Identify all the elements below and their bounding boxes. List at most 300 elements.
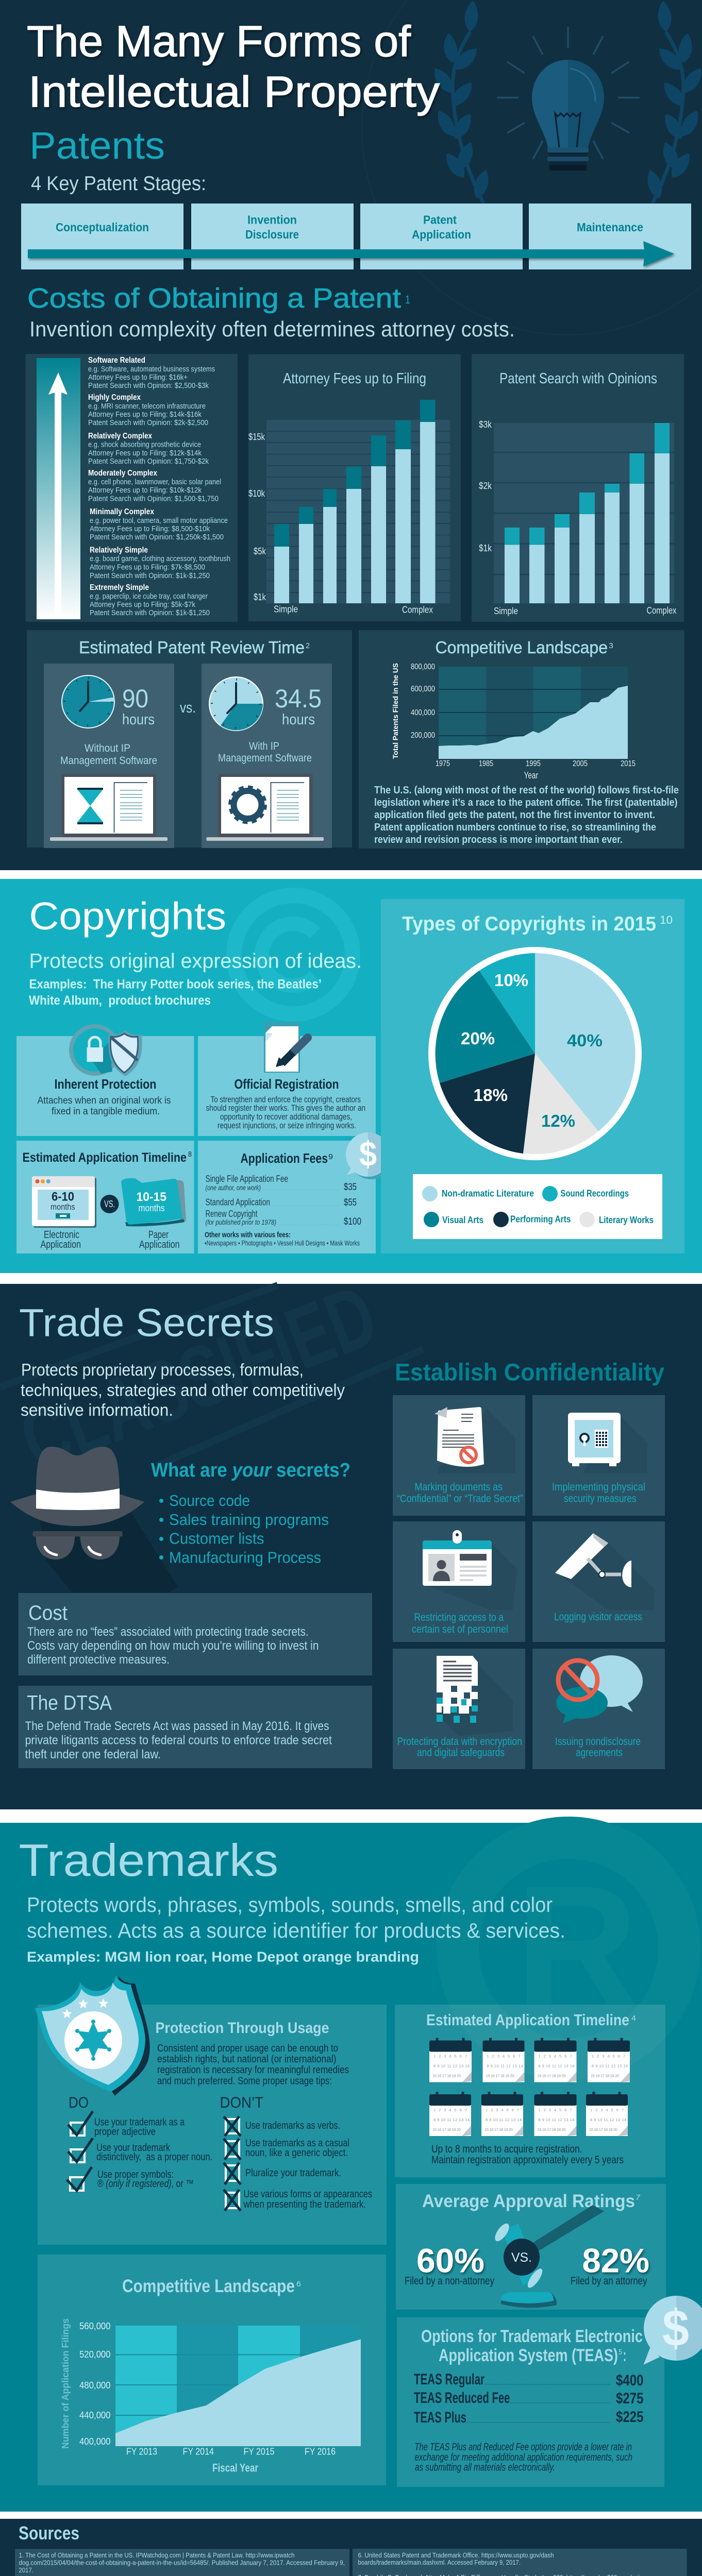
axis labels: $1k	[479, 543, 492, 553]
axis labels: FY 2014	[182, 2446, 214, 2456]
fee rows: $100	[344, 1216, 361, 1227]
panel: inherent protection: Inherent Protection	[55, 1076, 157, 1092]
panel: sources left: dog.com/2015/04/04/the-cost-of-obtaining-a-patent-in-the-us/id=56485/. Published January 7, 2017. Accessed February 9,	[19, 2558, 345, 2567]
text: usage description	[157, 2043, 349, 2087]
panel: patent search chart	[472, 354, 684, 622]
heading: patents: Patents	[29, 124, 165, 167]
icon: paper folder: months	[138, 1203, 165, 1213]
stat: 60 percent: 60%	[416, 2241, 484, 2279]
tier: software related	[88, 356, 215, 390]
text: usage description: and much preferred. Some proper usage tips:	[157, 2075, 332, 2087]
text: trade secrets definition: techniques, strategies and other competitively	[21, 1381, 345, 1399]
comparison: with software: 34.5	[275, 684, 322, 713]
axis labels: Complex	[646, 605, 676, 616]
card: restricting access	[393, 1521, 525, 1642]
axis labels: 800,000	[411, 663, 435, 671]
tier: moderately complex: Attorney Fees up to Filing: $10k-$12k	[88, 486, 202, 495]
arrow: timeline	[28, 241, 674, 266]
icon: encrypted document	[437, 1656, 478, 1723]
fee table: $275	[616, 2390, 643, 2407]
tier: highly complex: Patent Search with Opinion: $2k-$2,500	[88, 418, 208, 427]
icon: speech bubbles with prohibition sign	[556, 1655, 643, 1723]
icon: safe	[568, 1413, 621, 1466]
panel: average approval ratings: 7	[636, 2193, 641, 2202]
icon: calendar 1: 1 2 3 4 5 6 7	[433, 2054, 467, 2059]
text: trademarks definition: schemes. Acts as a source identifier for products & services.	[27, 1919, 565, 1942]
tier: relatively simple: e.g. board game, clothing accessory, toothbrush	[90, 554, 230, 563]
tier: extremely simple: e.g. paperclip, ice cube tray, coat hanger	[90, 592, 208, 601]
area chart: application filings: Number of Application Filings	[60, 2318, 71, 2449]
chart title: 10	[660, 913, 673, 926]
comparison: with software: With IP	[249, 740, 279, 752]
text: trademarks definition: Protects words, phrases, symbols, sounds, smells, and color	[27, 1893, 553, 1917]
card: protecting data	[393, 1649, 525, 1769]
panel: inherent protection	[16, 1026, 194, 1136]
stage: patent application: Application	[412, 228, 471, 241]
heading: establish confidentiality: Establish Confidentiality	[395, 1358, 664, 1386]
icon: browser window: months	[51, 1202, 75, 1212]
pie chart: 18%	[473, 1086, 508, 1105]
panel: TEAS options: Application System (TEAS)	[439, 2346, 618, 2365]
list: secrets: Source code	[169, 1492, 250, 1510]
legend: Performing Arts	[510, 1214, 571, 1224]
heading: 4 key patent stages: 4 Key Patent Stages:	[31, 173, 206, 195]
tier: highly complex: e.g. MRI scanner, telecom infrastructure	[88, 402, 206, 411]
watermark: registered symbol: R	[515, 1850, 638, 2040]
panel: cost: There are no “fees” associated with protecting trade secrets.	[27, 1625, 308, 1639]
panel: competitive landscape trademarks: Competitive Landscape	[122, 2276, 295, 2296]
card: marking documents: “Confidential” or “Trade Secret”	[397, 1493, 523, 1504]
comparison: without software: Without IP	[85, 742, 130, 754]
icon: clock 90 hours	[62, 675, 114, 728]
panel: competitive landscape trademarks	[38, 2255, 386, 2485]
tier: minimally complex: Patent Search with Opinion: $1,250k-$1,500	[90, 533, 224, 541]
axis labels	[79, 2321, 336, 2456]
pie chart: 20%	[461, 1029, 495, 1048]
list: secrets	[159, 1492, 329, 1566]
watermark: classified stamp: CLASSIFIED	[8, 1266, 389, 1490]
bar chart: patent search	[479, 419, 676, 616]
panel: estimated application timeline: Electronic	[44, 1229, 79, 1241]
panel: official registration	[198, 1022, 376, 1136]
icon: calendar 6: 8 9 10 11 12 13 14	[486, 2117, 522, 2122]
icon: calendar 7: 15 16 17 18 19 20	[537, 2127, 566, 2132]
fee rows: Single File Application Fee	[205, 1174, 288, 1184]
comparison: without software: 90	[122, 684, 148, 713]
card: marking documents: Marking douments as	[414, 1481, 503, 1493]
fee table: TEAS Reduced Fee	[414, 2389, 510, 2406]
card: nondisclosure agreements: agreements	[576, 1747, 623, 1759]
stage: invention disclosure	[191, 204, 354, 269]
fee table	[414, 2371, 643, 2426]
text: usage description: establish rights, but national (or international)	[157, 2054, 336, 2065]
icon: bulb glass	[532, 60, 604, 171]
axis labels: Simple	[274, 604, 298, 614]
icon: calendar 3: 1 2 3 4 5 6 7	[538, 2054, 572, 2059]
axis labels	[479, 419, 676, 616]
text: TEAS note	[414, 2442, 632, 2473]
tier: software related: Attorney Fees up to Filing: $16k+	[88, 373, 188, 382]
title: The Many Forms of	[27, 17, 411, 65]
panel: official registration: To strengthen and enforce the copyright, creators	[210, 1094, 361, 1105]
heading: copyrights: Copyrights	[29, 894, 226, 938]
icon: calendar 5: 1 2 3 4 5 6 7	[433, 2108, 467, 2112]
icon: calendar 6: 15 16 17 18 19 20	[484, 2127, 513, 2132]
axis labels: 200,000	[411, 731, 435, 740]
panel: TEAS options: Options for Trademark Electronic	[421, 2327, 643, 2346]
vs badge: VS.	[104, 1199, 115, 1209]
panel: competitive landscape patents	[359, 630, 684, 849]
icon: calendar 4: 1 2 3 4 5 6 7	[592, 2054, 625, 2059]
panel: estimated application timeline: Application	[139, 1239, 179, 1250]
axis labels: 400,000	[411, 708, 435, 717]
icon: calendar 4: 15 16 17 18 19 20	[591, 2073, 619, 2078]
tier: relatively complex	[88, 432, 209, 466]
icon: gavel	[492, 2205, 604, 2308]
list: don't	[220, 2094, 372, 2211]
axis labels: 400,000	[79, 2436, 110, 2447]
text: first-to-file explanation: review and revision process is more important than ever.	[374, 834, 623, 845]
icon: calendar 1	[429, 2038, 472, 2082]
text: copyrights examples	[29, 977, 322, 1008]
icon: document and pen	[264, 1022, 308, 1073]
panel title: 3	[609, 641, 613, 650]
list: don't: DON’T	[220, 2094, 263, 2111]
card: physical security: security measures	[564, 1493, 636, 1504]
icon: browser window	[32, 1176, 96, 1228]
icon: calendar 2: 1 2 3 4 5 6 7	[487, 2054, 521, 2059]
stage: patent application: Patent	[423, 213, 457, 227]
panel: sources left: 1. The Cost of Obtaining a Patent in the US. IPWatchdog.com | Patents & Patent Law. http://www.ipwatch	[19, 2551, 295, 2559]
icon: browser window: 6-10	[52, 1190, 74, 1204]
icon: calendar 4	[588, 2038, 630, 2082]
axis labels	[248, 432, 433, 615]
panel: TEAS options	[397, 2317, 664, 2487]
fee rows: (for published prior to 1978)	[205, 1218, 276, 1226]
stage: invention disclosure: Invention	[247, 213, 297, 227]
stage: conceptualization	[21, 204, 183, 269]
pie chart	[428, 947, 642, 1160]
tier: software related: Patent Search with Opinion: $2,500-$3k	[88, 381, 209, 390]
icon: dollar bubble: $	[359, 1134, 377, 1174]
icon: marked document	[434, 1407, 484, 1467]
comparison: with software	[202, 664, 332, 848]
gradient bar with arrow	[37, 358, 80, 619]
card: marking documents	[393, 1395, 525, 1516]
axis labels: 480,000	[79, 2380, 110, 2391]
icon: laptop with hourglass	[50, 774, 168, 841]
icon: paper folder: 10-15	[136, 1190, 166, 1204]
tier: moderately complex: Patent Search with Opinion: $1,500-$1,750	[88, 495, 219, 503]
fee rows: $55	[344, 1197, 357, 1208]
list: do	[67, 2094, 212, 2191]
watermark: classified stamp	[0, 1266, 423, 1490]
section background: patents	[0, 0, 702, 870]
text: trademarks examples: Examples: MGM lion roar, Home Depot orange branding	[27, 1948, 419, 1965]
comparison: without software	[44, 664, 174, 848]
stage: invention disclosure: Disclosure	[245, 228, 299, 241]
panel: protection through usage: Protection Through Usage	[156, 2020, 329, 2037]
list: do: distinctively, as a proper noun.	[96, 2151, 212, 2163]
section background: trademarks	[0, 1823, 702, 2512]
tier: relatively simple: Attorney Fees up to Filing: $7k-$8,500	[90, 563, 205, 572]
subheading: complexity: Invention complexity often determines attorney costs.	[29, 317, 515, 341]
panel: average approval ratings: Average Approval Ratings	[422, 2191, 635, 2211]
icon: gavel: VS.	[511, 2250, 532, 2265]
tier: extremely simple	[90, 583, 210, 617]
list: don't: Use trademarks as verbs.	[245, 2120, 340, 2131]
chart title: Patent Search with Opinions	[499, 370, 657, 387]
card: nondisclosure agreements: Issuing nondisclosure	[555, 1736, 641, 1748]
axis labels: 520,000	[79, 2349, 110, 2360]
axis labels: FY 2015	[243, 2446, 274, 2456]
tier: relatively complex: e.g. shock absorbing prosthetic device	[88, 440, 201, 449]
list: secrets: Manufacturing Process	[169, 1549, 321, 1566]
icon: calendar 5: 8 9 10 11 12 13 14	[433, 2117, 470, 2122]
panel: inherent protection: fixed in a tangible medium.	[52, 1106, 160, 1117]
fee rows: $35	[344, 1182, 357, 1193]
icon: paper folder	[121, 1178, 186, 1226]
tier: moderately complex: e.g. cell phone, lawnmower, basic solar panel	[88, 478, 221, 486]
list: do: Use proper symbols:	[97, 2169, 174, 2180]
panel: cost: Cost	[28, 1602, 68, 1624]
icon: calendar 7	[534, 2092, 576, 2136]
text: TEAS note: as submitting all materials electronically.	[415, 2462, 555, 2473]
watermark: copyright symbol	[234, 895, 353, 1014]
panel: estimated application timeline	[16, 1141, 194, 1253]
icon: dollar bubble: $	[662, 2299, 689, 2357]
bar chart: attorney fees	[248, 400, 450, 615]
axis labels: 2005	[573, 759, 588, 768]
panel: the DTSA: The DTSA	[27, 1692, 112, 1715]
pie chart: 40%	[567, 1031, 603, 1050]
card: restricting access: certain set of personnel	[412, 1623, 508, 1635]
axis labels: FY 2013	[126, 2446, 157, 2456]
legend: Sound Recordings	[561, 1188, 629, 1198]
panel: estimated application timeline: Maintain registration approximately every 5 years	[431, 2154, 624, 2166]
text: first-to-file explanation	[374, 785, 679, 845]
text: first-to-file explanation: application filed gets the patent, not the first inventor to invent.	[374, 809, 655, 821]
card: physical security: Implementing physical	[552, 1481, 645, 1493]
card: nondisclosure agreements	[532, 1649, 665, 1769]
icon: calendar 5: 15 16 17 18 19 20	[432, 2127, 461, 2132]
list: do: DO	[69, 2094, 89, 2111]
icon: calendar 1: 15 16 17 18 19 20	[432, 2073, 461, 2078]
panel: estimated application timeline: 8	[188, 1150, 192, 1159]
icon: calendar 7: 1 2 3 4 5 6 7	[538, 2108, 572, 2112]
axis labels: 1985	[479, 759, 493, 768]
tier: minimally complex: Minimally Complex	[90, 507, 154, 516]
stage: maintenance: Maintenance	[577, 221, 643, 234]
panel: estimated patent review time	[27, 630, 352, 848]
text: usage description: registration is necessary for meaningful remedies	[157, 2064, 349, 2076]
panel: estimated application timeline: 4	[631, 2014, 636, 2023]
comparison: without software: Management Software	[60, 755, 157, 767]
panel: application fees	[198, 1141, 376, 1253]
list: do: Use your trademark	[96, 2142, 171, 2154]
tier: relatively simple	[90, 546, 230, 580]
panel title: 2	[306, 641, 310, 650]
text: TEAS note: The TEAS Plus and Reduced Fee options provide a lower rate in	[414, 2442, 632, 2453]
list: secrets: Sales training programs	[169, 1511, 329, 1529]
icon: security camera	[555, 1533, 631, 1587]
fee table: $400	[616, 2372, 643, 2389]
fee rows: Standard Application	[205, 1197, 270, 1208]
panel: cost: Costs vary depending on how much you’re willing to invest in	[27, 1639, 319, 1653]
tier: relatively complex: Patent Search with Opinion: $1,750-$2k	[88, 457, 209, 466]
panel: sources left	[15, 2549, 349, 2576]
icon: left laurel	[429, 0, 492, 203]
text: trademarks definition	[27, 1893, 565, 1942]
icon: calendar 6: 1 2 3 4 5 6 7	[486, 2108, 519, 2112]
panel: the DTSA	[19, 1686, 372, 1768]
icon: lightbulb with laurels	[362, 0, 702, 335]
watermark: registered symbol	[437, 1817, 700, 2080]
panel: the DTSA: private litigants access to federal courts to enforce trade secret	[25, 1733, 332, 1748]
vs label: vs.	[180, 700, 196, 716]
icon: right laurel	[644, 0, 702, 203]
panel: average approval ratings	[396, 2184, 666, 2310]
icon: calendar 1: 8 9 10 11 12 13 14	[433, 2064, 470, 2068]
panel: inherent protection: Attaches when an original work is	[37, 1095, 171, 1106]
axis labels: $10k	[248, 488, 265, 499]
vs badge	[100, 1195, 119, 1213]
text: first-to-file explanation: legislation where it’s a race to the patent office. The first (patentable)	[374, 797, 677, 808]
panel: official registration: Official Registration	[234, 1076, 339, 1092]
fee table: $225	[616, 2409, 643, 2426]
heading: trademarks: Trademarks	[19, 1835, 278, 1886]
card: physical security	[532, 1395, 665, 1516]
text: trade secrets definition: sensitive information.	[21, 1400, 173, 1419]
title	[27, 17, 440, 116]
tier: extremely simple: Patent Search with Opinion: $1k-$1,250	[90, 608, 210, 617]
axis labels: Year	[524, 770, 538, 781]
panel: application fees: 9	[328, 1153, 333, 1161]
tier: relatively complex: Attorney Fees up to Filing: $12k-$14k	[88, 449, 202, 457]
text: trade secrets definition: Protects proprietary processes, formulas,	[21, 1360, 304, 1379]
tier: relatively simple: Relatively Simple	[90, 546, 148, 554]
icon: calendar 5	[429, 2092, 471, 2136]
fee rows: Other works with various fees:	[205, 1230, 291, 1240]
comparison: with software: Management Software	[218, 752, 312, 764]
tier: minimally complex: Attorney Fees up to Filing: $8,500-$10k	[90, 524, 210, 533]
panel: sources right	[353, 2549, 687, 2576]
icon: calendar 3: 8 9 10 11 12 13 14	[538, 2064, 574, 2068]
axis labels: 2015	[621, 759, 636, 768]
panel: sources right: 6. United States Patent and Trademark Office. https://www.uspto.gov/dash	[358, 2551, 554, 2559]
panel: cost: different protective measures.	[27, 1653, 170, 1667]
heading: sources: Sources	[19, 2522, 79, 2544]
tier: extremely simple: Attorney Fees up to Filing: $5k-$7k	[90, 600, 195, 609]
icon: calendar 2: 8 9 10 11 12 13 14	[487, 2064, 523, 2068]
panel: sources left: 2017.	[19, 2566, 34, 2574]
icon: laptop with gear	[206, 774, 324, 841]
icon: calendar 7: 8 9 10 11 12 13 14	[538, 2117, 574, 2122]
axis labels: $2k	[479, 481, 492, 491]
fee rows: (one author, one work)	[205, 1183, 261, 1192]
stage: patent application	[360, 204, 523, 269]
card: protecting data: and digital safeguards	[417, 1747, 505, 1759]
list: don't: Use trademarks as a casual	[245, 2138, 349, 2149]
tier: relatively complex: Relatively Complex	[88, 432, 152, 440]
tier: highly complex: Attorney Fees up to Filing: $14k-$16k	[88, 410, 202, 419]
icon: calendar 3	[534, 2038, 576, 2082]
panel: estimated application timeline: Estimated Application Timeline	[426, 2011, 629, 2029]
icon: calendar 6	[481, 2092, 523, 2136]
text: copyrights examples: White Album, product brochures	[29, 993, 211, 1008]
panel: estimated application timeline: Paper	[148, 1229, 169, 1241]
axis labels: $5k	[254, 546, 266, 556]
card: protecting data: Protecting data with encryption	[397, 1736, 522, 1748]
icon: calendar 8: 15 16 17 18 19 20	[589, 2127, 617, 2132]
text: first-to-file explanation: The U.S. (along with most of the rest of the world) follows first-to-file	[374, 785, 679, 796]
heading: costs of obtaining a patent: Costs of Obtaining a Patent	[27, 283, 401, 314]
fee rows	[205, 1174, 361, 1247]
heading: what are your secrets: What are your secrets?	[151, 1460, 350, 1481]
tier: minimally complex: e.g. power tool, camera, small motor appliance	[90, 516, 228, 525]
axis labels: FY 2016	[305, 2446, 336, 2456]
heading: trade secrets: Trade Secrets	[19, 1301, 274, 1345]
fee table: TEAS Plus	[414, 2409, 466, 2426]
axis labels: Simple	[494, 606, 518, 616]
comparison: with software: hours	[282, 711, 315, 728]
area chart: patents filed	[391, 663, 636, 781]
card: logging visitors: Logging visitor access	[554, 1611, 642, 1623]
list: don't: Use various forms or appearances	[243, 2189, 372, 2200]
icon: calendar 3: 15 16 17 18 19 20	[537, 2073, 566, 2078]
tier: software related: e.g. Software, automated business systems	[88, 365, 215, 374]
panel: estimated application timeline: Up to 8 months to acquire registration.	[431, 2143, 582, 2155]
icon: spy hat and glasses	[10, 1447, 178, 1633]
axis labels: Complex	[402, 605, 433, 615]
panel: official registration: should register their works. This gives the author an	[206, 1103, 365, 1113]
axis labels: 600,000	[411, 685, 435, 693]
pie chart: 10%	[494, 971, 528, 990]
axis labels: 1995	[526, 759, 541, 768]
panel: complexity scale	[26, 354, 238, 622]
stat: 82 percent: Filed by an attorney	[571, 2275, 647, 2287]
icon: dollar bubble	[346, 1132, 393, 1179]
icon: calendar 8: 8 9 10 11 12 13 14	[590, 2117, 626, 2122]
legend: Visual Arts	[442, 1215, 483, 1225]
chart title: Types of Copyrights in 2015	[402, 913, 656, 935]
section background: sources	[0, 2519, 702, 2576]
list: do: Use your trademark as a	[94, 2116, 185, 2128]
icon: calendar 8: 1 2 3 4 5 6 7	[590, 2108, 624, 2112]
axis labels: $3k	[479, 419, 492, 430]
tier: highly complex	[88, 393, 208, 427]
stage: conceptualization: Conceptualization	[56, 221, 149, 234]
panel: the DTSA: theft under one federal law.	[25, 1748, 161, 1761]
panel title: Competitive Landscape	[435, 638, 608, 657]
list: do: ® (only if registered), or ™	[97, 2178, 194, 2190]
card: restricting access: Restricting access to a	[414, 1612, 504, 1623]
tier: highly complex: Highly Complex	[88, 393, 141, 402]
panel: protection through usage	[35, 1975, 387, 2245]
axis labels	[411, 663, 636, 781]
icon: light rays	[497, 27, 640, 159]
card: logging visitors	[532, 1521, 665, 1642]
icon: calendar 4: 8 9 10 11 12 13 14	[592, 2064, 628, 2068]
icon: clock 34.5 hours	[209, 677, 263, 731]
legend	[413, 1174, 662, 1239]
fee rows: •Newspapers • Photographs • Vessel Hull Designs • Mask Works	[205, 1239, 360, 1247]
area chart: patents filed: Total Patents Filed in the US	[391, 663, 399, 759]
panel: sources right: boards/trademarks/main.dashxml. Accessed February 9, 2017.	[358, 2558, 521, 2566]
axis labels: 1975	[436, 759, 450, 768]
section background: trade secrets	[0, 1284, 702, 1809]
stat: 60 percent: Filed by a non-attorney	[405, 2275, 494, 2287]
